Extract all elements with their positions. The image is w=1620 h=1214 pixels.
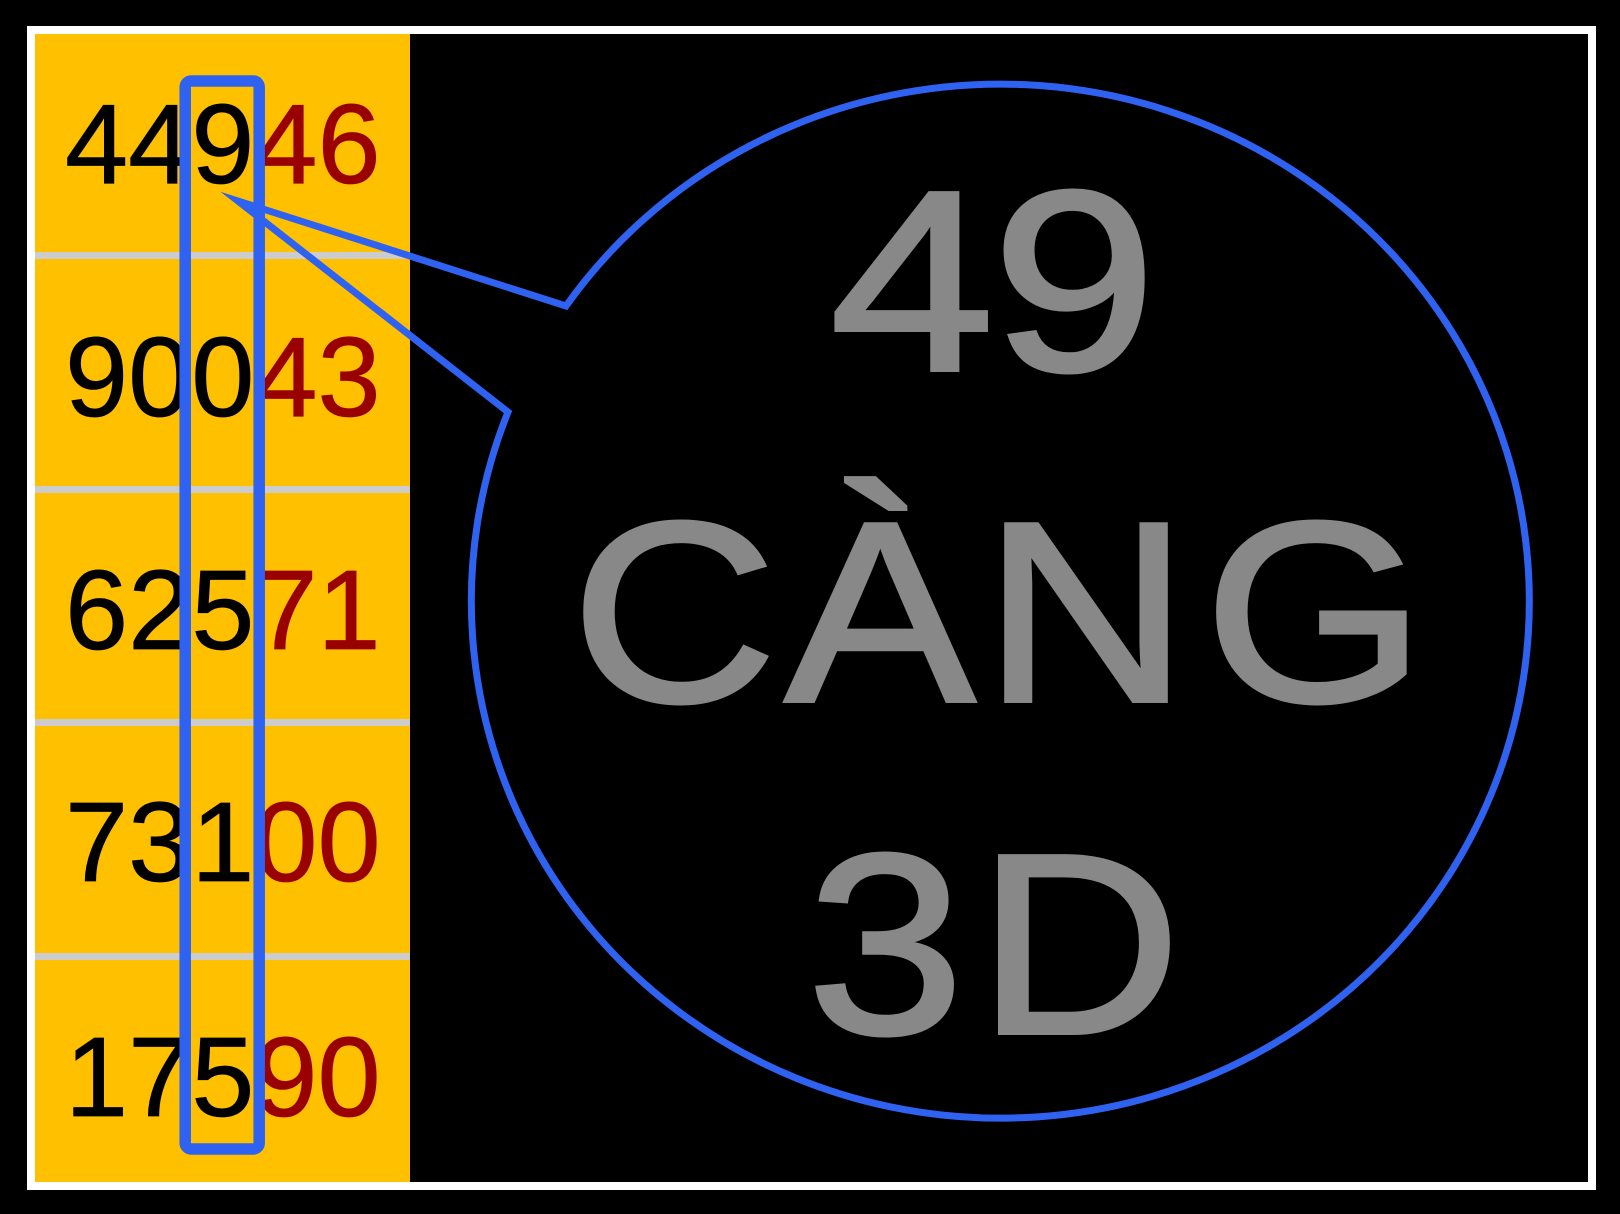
highlight box: hundreds column [185, 81, 259, 1149]
callout text: 49 CÀNG 3D: 3D [807, 801, 1181, 1088]
callout text: 49 CÀNG 3D: 49 [830, 137, 1156, 425]
panel: lottery results table: 90043 [65, 314, 381, 441]
callout text: 49 CÀNG 3D: CÀNG [571, 468, 1426, 756]
panel: lottery results table: 62571 [65, 547, 381, 674]
panel: lottery results table: 44946 [65, 81, 381, 208]
callout text: 49 CÀNG 3D [571, 137, 1426, 1088]
panel: lottery results table [35, 34, 410, 1182]
panel: lottery results table: 73100 [65, 779, 381, 906]
callout bubble with pointer [238, 84, 1529, 1118]
panel: lottery results table: 17590 [65, 1014, 381, 1141]
